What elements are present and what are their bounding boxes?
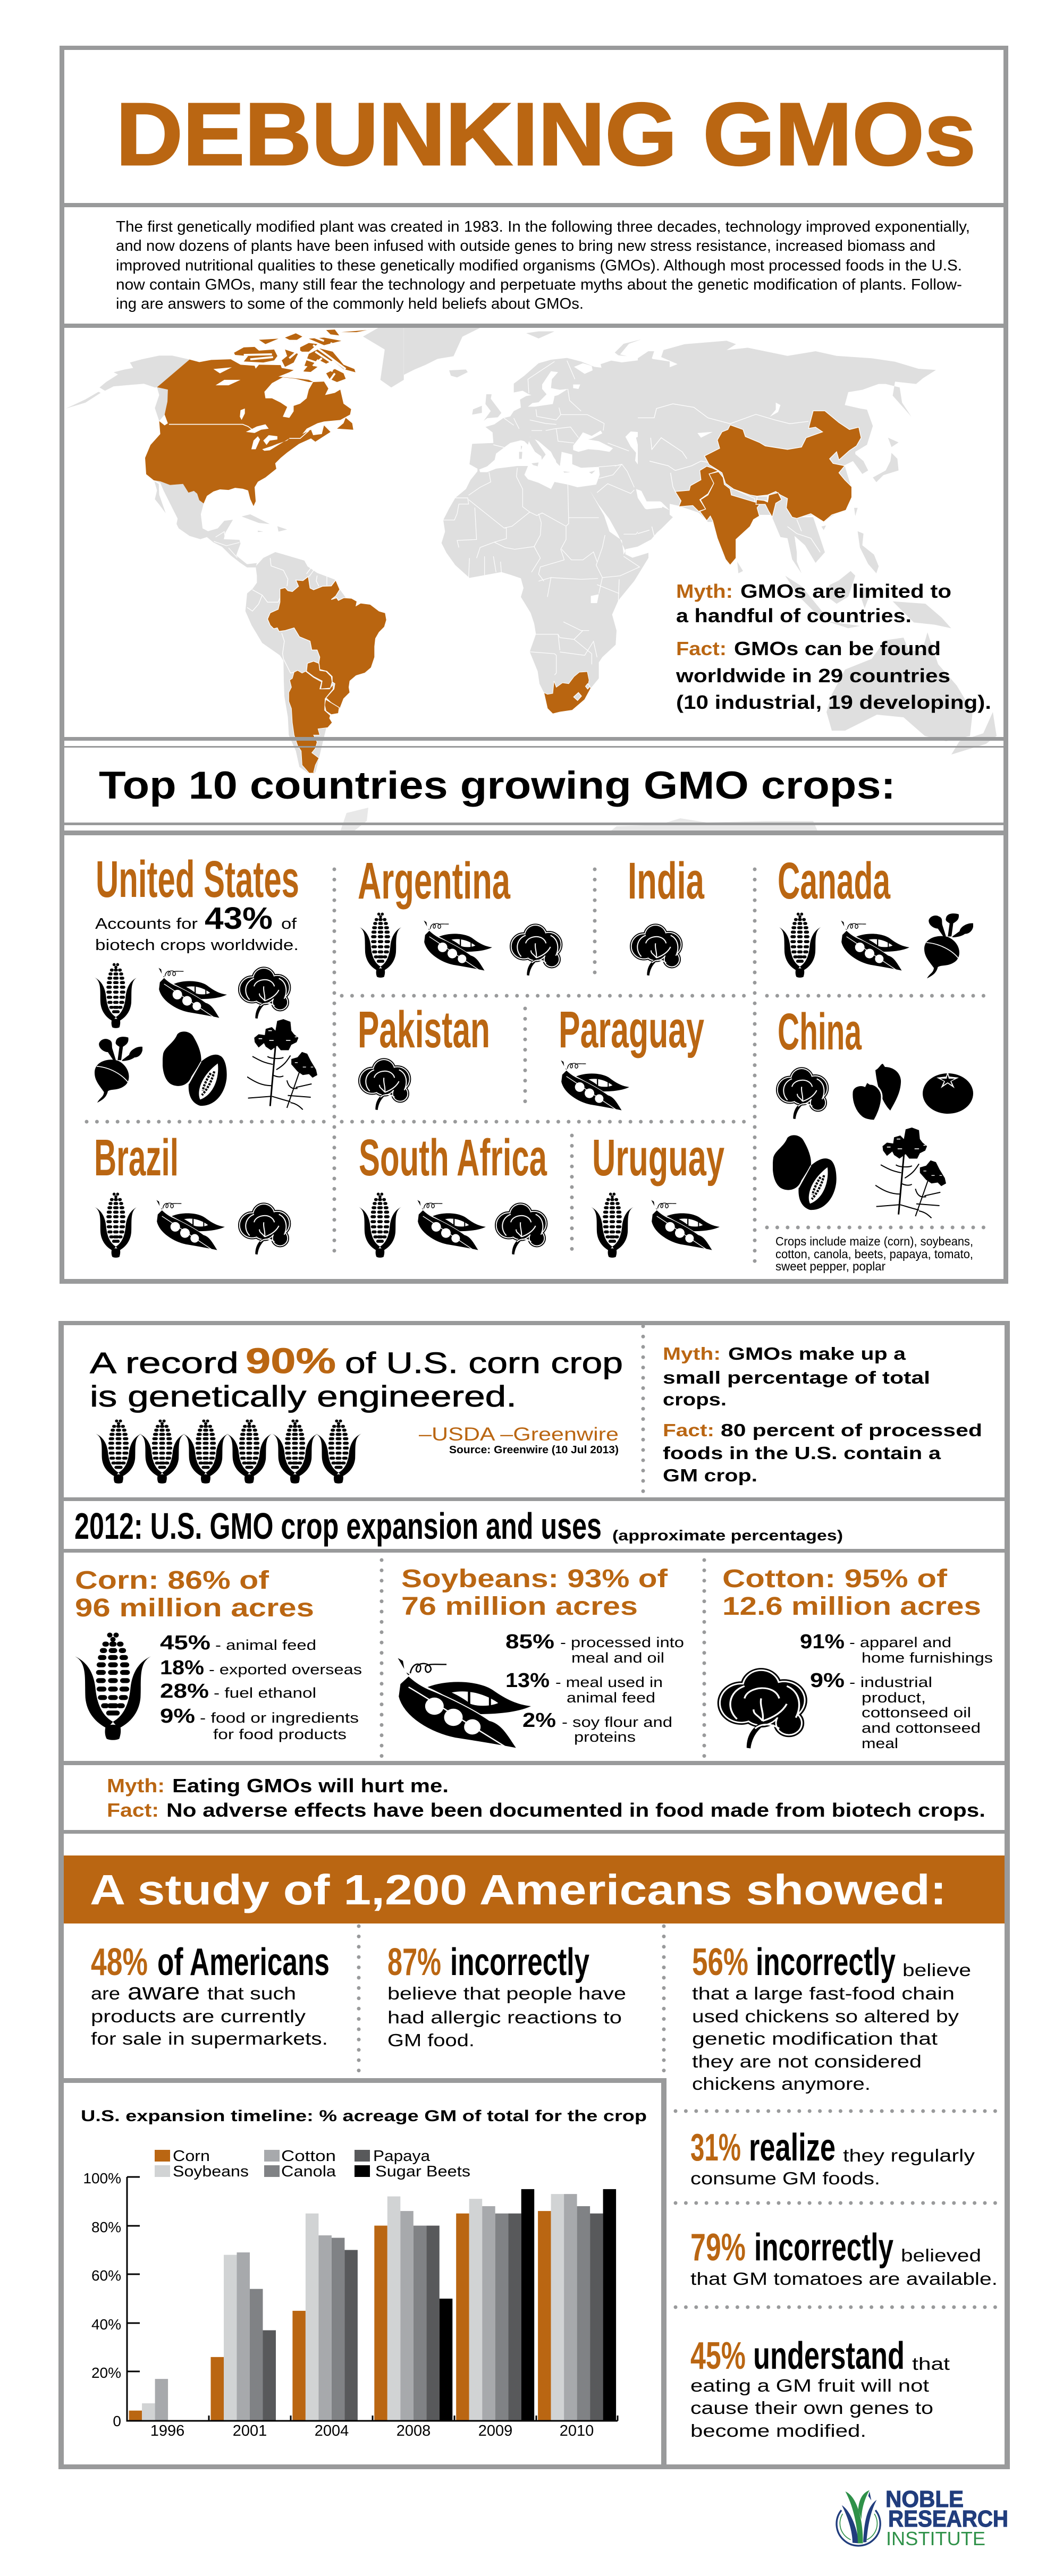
- panel: Paraguay: [559, 1001, 704, 1111]
- banner: study of 1,200 Americans: A study of 1,200 Americans showed:: [90, 1866, 947, 1913]
- stat: 56 percent incorrectly: genetic modification that: [692, 2029, 938, 2048]
- stat: 45 percent understand: [690, 2335, 950, 2441]
- chart legend: Corn: [173, 2148, 210, 2165]
- stat: 45 percent understand: cause their own genes to: [690, 2398, 933, 2418]
- note: crops list: cotton, canola, beets, papaya, tomato,: [775, 1247, 973, 1261]
- headline: record 90 percent corn crop: of U.S. corn crop: [345, 1346, 623, 1379]
- panel: South Africa: [359, 1129, 547, 1258]
- chart bars: 1996: [129, 2379, 168, 2420]
- stat: 31 percent realize: 31%: [690, 2126, 741, 2169]
- callout: myth and fact about countries: a handful of countries.: [676, 605, 912, 626]
- panel: cotton uses: 12.6 million acres: [722, 1592, 981, 1621]
- headline: record 90 percent corn crop: [90, 1341, 623, 1413]
- stat: 48 percent aware: 48%: [91, 1941, 148, 1984]
- chart x-axis labels: 2010: [560, 2422, 594, 2439]
- chart x-axis labels: 2001: [233, 2422, 267, 2439]
- intro paragraph: The first genetically modified plant was created in 1983. In the following three decades, technology improved exponentially,: [116, 218, 970, 235]
- intro paragraph: and now dozens of plants have been infused with outside genes to bring new stress resistance, increased biomass and: [116, 238, 935, 255]
- map: Antarctica: [340, 808, 819, 833]
- callout: myth and fact about safety: No adverse effects have been documented in food made from biotech crops.: [166, 1799, 985, 1821]
- chart y-axis labels: [83, 2170, 121, 2429]
- stat: 87 percent incorrectly: incorrectly: [450, 1941, 589, 1984]
- panel: soybean uses: 76 million acres: [401, 1592, 638, 1621]
- stat: 48 percent aware: for sale in supermarkets.: [91, 2029, 328, 2048]
- chart legend: [155, 2148, 470, 2180]
- source attribution: Source: Greenwire (10 Jul 2013): [449, 1444, 619, 1456]
- panel: Argentina: Argentina: [358, 852, 511, 910]
- panel: Argentina: [358, 852, 561, 978]
- banner: study of 1,200 Americans: [64, 1855, 1005, 1923]
- stat: 48 percent aware: products are currently: [91, 2006, 306, 2026]
- logo: Noble Research Institute: [837, 2486, 1008, 2549]
- chart legend: Sugar Beets: [375, 2163, 470, 2180]
- stat: 48 percent aware: [91, 1941, 330, 2048]
- stat: 48 percent aware: that such: [207, 1984, 296, 2003]
- panel: corn uses: for food products: [213, 1726, 347, 1742]
- dotted dividers: countries grid: [87, 869, 989, 1270]
- panel frame: lower section: [58, 1321, 1010, 2469]
- stat: 79 percent incorrectly: believed: [901, 2245, 981, 2265]
- panel: soybean uses: [396, 1565, 684, 1749]
- chart legend: Canola: [281, 2163, 336, 2180]
- chart legend: Soybeans: [173, 2163, 249, 2180]
- panel: soybean uses: 13%: [505, 1670, 550, 1692]
- panel: corn uses: - food or ingredients: [200, 1710, 359, 1726]
- logo emblem: [837, 2490, 880, 2546]
- panel: corn uses: 18%: [160, 1657, 204, 1679]
- logo: Noble Research Institute: RESEARCH: [888, 2506, 1008, 2532]
- callout: myth and fact about share of crops: [663, 1344, 982, 1485]
- panel: Pakistan: [358, 1001, 490, 1110]
- intro paragraph: [116, 218, 970, 312]
- panel: Canada: Canada: [778, 852, 891, 910]
- panel: Brazil: [94, 1129, 289, 1258]
- title: DEBUNKING GMOs: [116, 85, 976, 184]
- source attribution: –USDA –Greenwire: [419, 1424, 619, 1445]
- stat: 79 percent incorrectly: incorrectly: [754, 2226, 893, 2269]
- stat: 79 percent incorrectly: [690, 2226, 998, 2289]
- panel: Uruguay: [591, 1129, 724, 1258]
- chart bars: 2008: [374, 2197, 452, 2420]
- stat: 79 percent incorrectly: that GM tomatoes are available.: [690, 2269, 998, 2289]
- chart y-axis labels: 20%: [91, 2365, 121, 2381]
- dotted dividers: lower section: [359, 1326, 996, 2307]
- callout: myth and fact about countries: [676, 580, 991, 713]
- panel: cotton uses: 9%: [810, 1670, 845, 1692]
- panel: corn uses: - fuel ethanol: [214, 1685, 316, 1701]
- note: crops list: Crops include maize (corn), soybeans,: [775, 1234, 973, 1248]
- stat: 56 percent incorrectly: that a large fast-food chain: [692, 1984, 955, 2003]
- stat: 56 percent incorrectly: believe: [902, 1960, 971, 1980]
- chart legend: Cotton: [281, 2148, 336, 2165]
- stat: 48 percent aware: of Americans: [157, 1941, 330, 1984]
- callout: myth and fact about safety: Myth:: [107, 1775, 165, 1797]
- panel: soybean uses: Soybeans: 93% of: [401, 1565, 668, 1593]
- chart: U.S. expansion timeline: [81, 2107, 647, 2439]
- panel: cotton uses: cottonseed oil: [862, 1705, 971, 1721]
- intro paragraph: now contain GMOs, many still fear the technology and perpetuate myths about the genetic modification of plants. Follow-: [116, 276, 962, 293]
- panel: corn uses: 28%: [160, 1680, 209, 1702]
- chart axes: [127, 2177, 618, 2421]
- chart x-axis labels: 1996: [150, 2422, 184, 2439]
- map: Australia and New Zealand: [826, 632, 997, 755]
- callout: myth and fact about share of crops: small percentage of total: [663, 1368, 930, 1387]
- stat: 48 percent aware: aware: [128, 1979, 200, 2005]
- panel: cotton uses: meal: [862, 1735, 898, 1751]
- stat: 31 percent realize: they regularly: [843, 2146, 975, 2165]
- panel: soybean uses: - meal used in: [555, 1674, 663, 1690]
- stat: 45 percent understand: understand: [753, 2335, 905, 2377]
- intro paragraph: improved nutritional qualities to these genetically modified organisms (GMOs). Although most processed foods in the U.S.: [116, 257, 962, 274]
- panel: corn uses: 45%: [160, 1632, 210, 1654]
- stat: 56 percent incorrectly: chickens anymore.: [692, 2074, 871, 2094]
- panel: corn uses: 9%: [160, 1705, 195, 1727]
- panel: soybean uses: - processed into: [560, 1634, 684, 1650]
- panel: India: [628, 852, 705, 976]
- panel: United States: Accounts for: [95, 916, 198, 933]
- intro paragraph: ing are answers to some of the commonly held beliefs about GMOs.: [116, 295, 584, 312]
- heading: 2012 crop expansion: (approximate percentages): [612, 1527, 843, 1544]
- panel: soybean uses: meal and oil: [571, 1650, 664, 1666]
- callout: myth and fact about share of crops: Myth:: [663, 1344, 721, 1363]
- logo: Noble Research Institute: INSTITUTE: [886, 2528, 985, 2549]
- panel: soybean uses: - soy flour and: [562, 1714, 672, 1730]
- stat: 56 percent incorrectly: incorrectly: [756, 1941, 896, 1984]
- chart y-axis labels: 60%: [91, 2267, 121, 2284]
- stat: 31 percent realize: realize: [749, 2126, 836, 2169]
- callout: myth and fact about safety: Fact:: [107, 1799, 159, 1821]
- panel: cotton uses: product,: [862, 1690, 926, 1706]
- chart bars: 2004: [292, 2214, 358, 2420]
- note: crops list: sweet pepper, poplar: [775, 1259, 885, 1273]
- callout: myth and fact about countries: worldwide in 29 countries: [676, 665, 950, 687]
- panel: soybean uses: animal feed: [567, 1690, 655, 1706]
- panel: soybean uses: 85%: [505, 1631, 554, 1653]
- stat: 87 percent incorrectly: GM food.: [387, 2030, 475, 2050]
- stat: 31 percent realize: consume GM foods.: [690, 2168, 880, 2188]
- panel: United States: [95, 850, 317, 1109]
- callout: myth and fact about countries: (10 industrial, 19 developing).: [676, 691, 991, 713]
- panel: Uruguay: Uruguay: [592, 1129, 724, 1187]
- panel: United States: biotech crops worldwide.: [95, 937, 299, 954]
- panel: cotton uses: - industrial: [849, 1674, 932, 1690]
- map: Europe, Africa and Middle East: [404, 328, 670, 714]
- world map: [66, 328, 997, 833]
- panel: United States: United States: [96, 850, 299, 908]
- panel: cotton uses: and cottonseed: [862, 1720, 981, 1736]
- chart bars: 2010: [538, 2189, 616, 2420]
- stat: 56 percent incorrectly: 56%: [692, 1941, 748, 1984]
- chart y-axis labels: 0: [113, 2413, 121, 2429]
- stat: 79 percent incorrectly: 79%: [690, 2226, 746, 2269]
- chart x-axis labels: 2008: [396, 2422, 431, 2439]
- stat: 56 percent incorrectly: used chickens so altered by: [692, 2006, 959, 2026]
- chart x-axis labels: 2004: [315, 2422, 349, 2439]
- chart bars: 2001: [210, 2252, 276, 2420]
- stat: 87 percent incorrectly: [387, 1941, 626, 2050]
- panel: United States: of: [281, 916, 297, 933]
- panel: United States: 43%: [205, 901, 273, 936]
- map: Asia and Oceania: [638, 341, 951, 628]
- callout: myth and fact about share of crops: GM crop.: [663, 1465, 757, 1485]
- panel: cotton uses: 91%: [800, 1631, 845, 1653]
- chart y-axis labels: 100%: [83, 2170, 121, 2187]
- chart legend: Papaya: [373, 2148, 431, 2165]
- panel: corn uses: - exported overseas: [209, 1662, 362, 1677]
- callout: myth and fact about share of crops: 80 percent of processed: [721, 1420, 982, 1440]
- callout: myth and fact about share of crops: foods in the U.S. contain a: [663, 1443, 941, 1463]
- heading: top 10 countries: Top 10 countries growing GMO crops:: [99, 764, 896, 807]
- stat: 45 percent understand: that: [912, 2354, 950, 2374]
- panel: Pakistan: Pakistan: [358, 1001, 490, 1058]
- stat: 48 percent aware: are: [91, 1984, 120, 2003]
- headline: record 90 percent corn crop: A record: [90, 1346, 239, 1379]
- stat: 45 percent understand: eating a GM fruit will not: [690, 2376, 929, 2395]
- chart y-axis labels: 80%: [91, 2219, 121, 2235]
- map: South America: [246, 552, 386, 773]
- panel: cotton uses: Cotton: 95% of: [722, 1565, 948, 1593]
- logo: Noble Research Institute: NOBLE: [885, 2486, 964, 2512]
- panel: corn uses: 96 million acres: [75, 1594, 314, 1622]
- heading: 2012 crop expansion: 2012: U.S. GMO crop expansion and uses: [74, 1505, 602, 1547]
- callout: myth and fact about countries: GMOs are limited to: [740, 580, 951, 602]
- panel: Paraguay: Paraguay: [559, 1001, 704, 1058]
- panel: cotton uses: [721, 1565, 993, 1751]
- callout: myth and fact about share of crops: crops.: [663, 1389, 727, 1409]
- callout: myth and fact about countries: Fact:: [676, 638, 727, 659]
- callout: myth and fact about share of crops: Fact:: [663, 1420, 714, 1440]
- panel: South Africa: South Africa: [359, 1129, 547, 1187]
- panel frame: top section: [60, 46, 1008, 1284]
- panel: cotton uses: - apparel and: [849, 1634, 951, 1650]
- stat: 56 percent incorrectly: [692, 1941, 971, 2094]
- note: crops list: [775, 1234, 973, 1273]
- chart x-axis labels: [150, 2422, 594, 2439]
- map: North America: [66, 328, 404, 567]
- panel: cotton uses: home furnishings: [862, 1650, 993, 1666]
- panel: Brazil: Brazil: [94, 1129, 179, 1187]
- callout: myth and fact about safety: [107, 1775, 985, 1821]
- panel: Canada: [778, 852, 973, 978]
- panel: soybean uses: 2%: [522, 1709, 556, 1732]
- callout: myth and fact about safety: Eating GMOs will hurt me.: [172, 1775, 449, 1797]
- stat: 56 percent incorrectly: they are not considered: [692, 2052, 922, 2071]
- panel: corn uses: [75, 1566, 362, 1742]
- stat: 45 percent understand: become modified.: [690, 2421, 866, 2441]
- panel: corn uses: Corn: 86% of: [75, 1566, 269, 1595]
- stat: 87 percent incorrectly: had allergic reactions to: [387, 2007, 622, 2027]
- chart bars: 2009: [456, 2189, 534, 2420]
- headline: record 90 percent corn crop: is genetically engineered.: [90, 1379, 517, 1413]
- source attribution: [419, 1424, 619, 1456]
- map: southern Africa: [544, 672, 591, 714]
- chart x-axis labels: 2009: [478, 2422, 512, 2439]
- panel: China: [773, 1003, 973, 1218]
- stat: 87 percent incorrectly: 87%: [387, 1941, 441, 1984]
- callout: myth and fact about share of crops: GMOs make up a: [728, 1344, 906, 1363]
- callout: myth and fact about countries: GMOs can be found: [734, 638, 941, 659]
- headline: record 90 percent corn crop: 90%: [246, 1341, 336, 1381]
- callout: myth and fact about countries: Myth:: [676, 580, 733, 602]
- stat: 31 percent realize: [690, 2126, 975, 2188]
- chart y-axis labels: 40%: [91, 2316, 121, 2333]
- stat: 45 percent understand: 45%: [690, 2335, 746, 2377]
- icon row: six corn cobs: [96, 1421, 361, 1484]
- panel: India: India: [628, 852, 705, 910]
- chart title: U.S. expansion timeline: % acreage GM of total for the crop: [81, 2107, 647, 2125]
- panel: corn uses: - animal feed: [215, 1637, 316, 1653]
- panel: China: China: [778, 1003, 862, 1061]
- stat: 87 percent incorrectly: believe that people have: [387, 1984, 626, 2003]
- panel: soybean uses: proteins: [574, 1729, 636, 1745]
